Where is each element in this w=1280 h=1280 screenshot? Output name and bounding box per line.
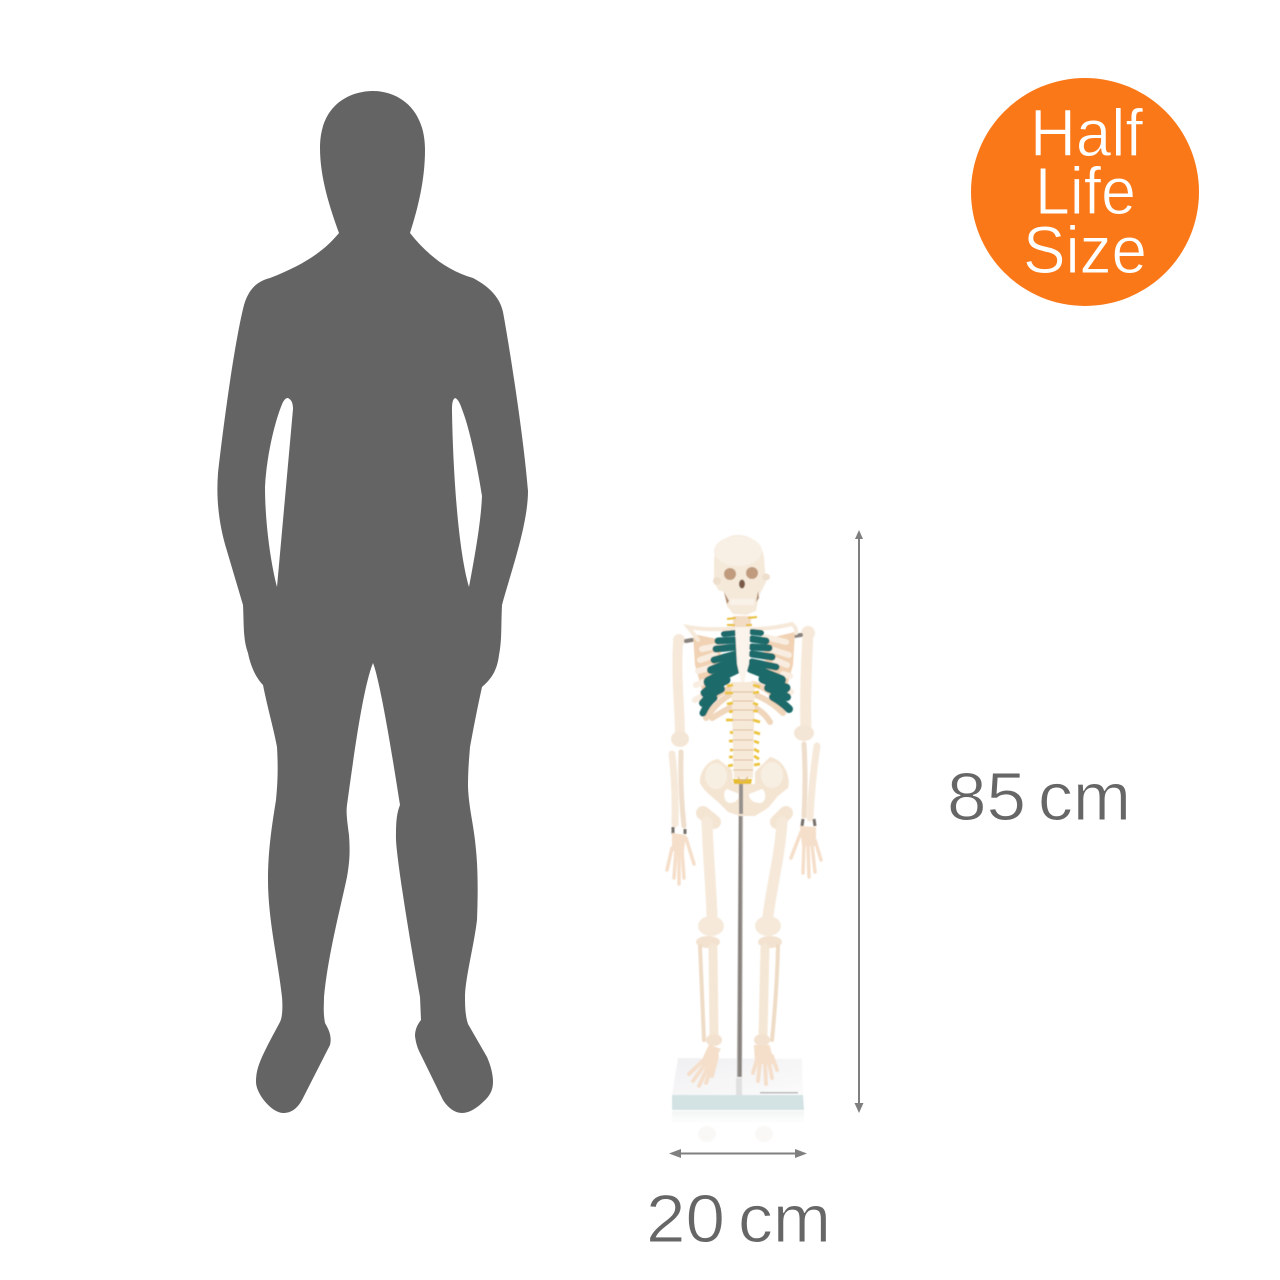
left leg — [696, 813, 724, 1046]
display base — [672, 1058, 804, 1110]
scapulae and bone ribs — [693, 632, 795, 722]
sternum — [735, 627, 750, 682]
pole in front of pelvis — [739, 784, 743, 814]
neck vertebrae and spinal nerves — [727, 616, 757, 627]
left arm — [671, 634, 692, 834]
badge: half life size: Life — [1035, 154, 1136, 229]
right hand — [791, 827, 821, 877]
height arrow — [854, 530, 864, 1113]
pelvis — [700, 757, 789, 816]
height label: cm — [1038, 759, 1131, 835]
badge: half life size — [971, 78, 1199, 306]
skeleton model on stand — [667, 535, 821, 1142]
badge: half life size: Size — [1023, 213, 1147, 288]
clavicles — [688, 624, 796, 640]
right foot — [753, 1047, 777, 1084]
badge: half life size: Half — [1030, 96, 1143, 171]
width label: 20 — [646, 1181, 725, 1257]
right cartilage — [751, 632, 789, 709]
green costal cartilage — [703, 632, 789, 713]
reflection under base — [672, 1111, 804, 1142]
right leg — [754, 813, 786, 1046]
height label: 85 — [947, 759, 1026, 835]
width arrow — [669, 1149, 807, 1158]
width label: cm — [738, 1181, 831, 1257]
spine with yellow nerves — [725, 682, 760, 792]
human silhouette for scale — [217, 91, 528, 1113]
left foot — [689, 1047, 718, 1086]
left cartilage — [703, 633, 737, 713]
skull — [713, 535, 770, 615]
left hand — [667, 834, 694, 884]
support pole — [737, 780, 743, 1077]
right arm — [794, 626, 817, 826]
